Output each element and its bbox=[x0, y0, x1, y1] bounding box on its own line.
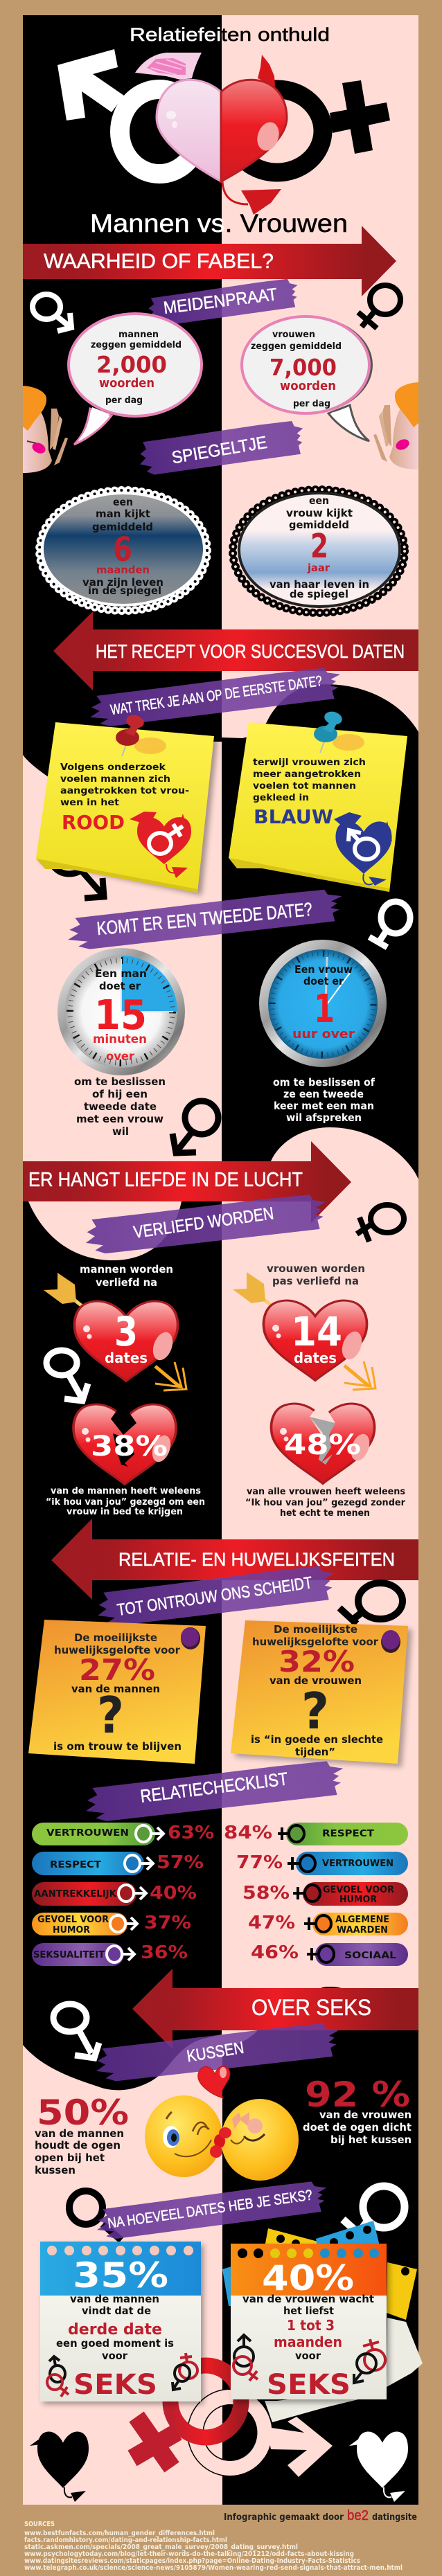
mirror: man: in de spiegel bbox=[88, 584, 161, 597]
mirror: woman: gemiddeld bbox=[289, 519, 349, 531]
row: seksualiteit 36: SEKSUALITEIT bbox=[33, 1950, 105, 1960]
row: respect 84: RESPECT bbox=[322, 1829, 374, 1839]
note: blauw: voelen tot mannen bbox=[253, 781, 356, 791]
ribbon: meidenpraat bbox=[145, 277, 301, 328]
icon: male black near clock bbox=[173, 1101, 218, 1153]
icon: male small black behind note bbox=[51, 843, 104, 898]
text: ik hou van jou women: van alle vrouwen heeft weleens bbox=[247, 1487, 405, 1497]
calendar: 35 percent: 35% bbox=[73, 2255, 168, 2296]
mirror: woman: een bbox=[309, 494, 329, 507]
note: blauw: BLAUW bbox=[254, 805, 333, 828]
icon: small heart bbox=[198, 2066, 230, 2098]
text: mannen worden: verliefd na bbox=[96, 1276, 157, 1289]
note: 32 percent bbox=[231, 1620, 412, 1767]
calendar: 35 percent: voor bbox=[102, 2350, 128, 2362]
row: sociaal 46: 46% bbox=[251, 1942, 299, 1963]
text: man decision bbox=[74, 1075, 166, 1138]
icon: female black small bbox=[357, 1205, 404, 1242]
calendar: 40 percent: het liefst bbox=[283, 2305, 334, 2317]
row: respect 84: 84% bbox=[224, 1823, 272, 1843]
stat: 92 percent: 92 % bbox=[305, 2075, 410, 2115]
checklist: men bbox=[32, 1823, 214, 1966]
row: sociaal 46 bbox=[251, 1942, 408, 1966]
title: Relatiefei ten onthuld bbox=[130, 24, 330, 45]
mirror: man: van zijn leven bbox=[82, 576, 163, 589]
text: ik hou van jou women: het echt te menen bbox=[280, 1508, 370, 1519]
row: gevoel voor humor 37: 37% bbox=[144, 1913, 191, 1933]
row: respect 57: 57% bbox=[157, 1852, 204, 1873]
arrow: over seks: OVER SEKS bbox=[251, 1995, 371, 2020]
note: 27 percent: huwelijksgelofte voor bbox=[54, 1644, 181, 1656]
speech bubble: men: woorden bbox=[99, 376, 154, 391]
speech bubble: women: per dag bbox=[293, 399, 330, 409]
ribbon: wat trek je aan bbox=[87, 665, 343, 728]
note: 32 percent: ? bbox=[301, 1682, 329, 1740]
icon: blue devil heart male bbox=[334, 812, 392, 886]
row: seksualiteit 36: 36% bbox=[141, 1942, 188, 1963]
icon: couple symbols right bbox=[173, 2353, 197, 2390]
note: 27 percent: 27% bbox=[79, 1653, 155, 1687]
note: blauw bbox=[229, 710, 411, 895]
stat: 50 percent: open bij het bbox=[35, 2152, 105, 2164]
note: blauw: gekleed in bbox=[253, 793, 309, 803]
icon: female symbol large bbox=[231, 80, 390, 172]
icon: kissing smileys bbox=[145, 2095, 299, 2181]
note: rood: ROOD bbox=[62, 811, 125, 834]
text: woman decision: om te beslissen of bbox=[273, 1076, 375, 1089]
arrow: over seks bbox=[132, 1969, 418, 2049]
stat: 50 percent: van de mannen bbox=[35, 2127, 124, 2140]
icon: couple symbols left bbox=[47, 2356, 69, 2397]
note: 32 percent: tijden” bbox=[295, 1746, 335, 1758]
mirror: man: een bbox=[113, 496, 133, 508]
text: man decision: met een vrouw bbox=[76, 1113, 163, 1125]
row: vertrouwen 63: 63% bbox=[168, 1823, 214, 1843]
row: vertrouwen 63 bbox=[32, 1823, 214, 1845]
row: algemene waarden 47: 47% bbox=[248, 1913, 295, 1933]
note: 27 percent: is om trouw te blijven bbox=[53, 1740, 182, 1753]
speech bubble: women: 7,000 bbox=[269, 354, 337, 381]
clock: man: over bbox=[106, 1050, 135, 1064]
ribbon: kussen bbox=[94, 2021, 342, 2083]
icon: male symbol large bbox=[58, 49, 199, 174]
sources: www.psychologytoday.com/blog/let-their-words-do-the-talking/201212/odd-facts-about-kissing bbox=[24, 2550, 354, 2558]
sources: facts.randomhistory.com/dating-and-relationship-facts.html bbox=[24, 2537, 227, 2544]
ribbon: meidenpraat: MEIDENPRAAT bbox=[162, 285, 279, 318]
row: respect 57: RESPECT bbox=[50, 1860, 101, 1870]
row: sociaal 46: SOCIAAL bbox=[344, 1951, 396, 1961]
mirror: woman: de spiegel bbox=[290, 588, 348, 600]
stat: 92 percent: bij het kussen bbox=[330, 2134, 412, 2146]
row: vertrouwen 77 bbox=[236, 1852, 408, 1875]
text: man decision: om te beslissen bbox=[74, 1075, 166, 1088]
heart with arrow: 14 dates: dates bbox=[294, 1350, 337, 1366]
clock: man: Een man bbox=[95, 967, 147, 980]
broken heart: 48%: 48% bbox=[284, 1429, 361, 1461]
mirror: man: maanden bbox=[96, 564, 150, 576]
heart with arrow: 3 dates: 3 bbox=[114, 1308, 138, 1355]
text: ik hou van jou men: “ik hou van jou” gezegd om een bbox=[46, 1497, 205, 1508]
note: 32 percent: huwelijksgelofte voor bbox=[252, 1636, 379, 1648]
sources bbox=[24, 2521, 403, 2572]
ribbon: kussen: KUSSEN bbox=[186, 2039, 245, 2066]
stat: 92 percent: doet de ogen dicht bbox=[303, 2121, 412, 2134]
mirror: woman: vrouw kijkt bbox=[286, 507, 353, 519]
sources: SOURCES bbox=[24, 2521, 55, 2528]
heart with arrow: 14 dates: 14 bbox=[291, 1308, 342, 1355]
clock: man: 15 bbox=[94, 991, 147, 1039]
heart with arrow: 14 dates bbox=[233, 1272, 375, 1390]
speech bubble: women bbox=[242, 316, 373, 441]
row: vertrouwen 63: VERTROUWEN bbox=[46, 1828, 129, 1839]
speech bubble: women: woorden bbox=[280, 379, 336, 393]
icon: couple symbols right second bbox=[354, 2339, 385, 2383]
text: vrouwen worden bbox=[267, 1262, 365, 1287]
text: ik hou van jou women bbox=[245, 1487, 406, 1519]
calendar: 35 percent: vindt dat de bbox=[82, 2305, 151, 2317]
credit line: datingsite bbox=[372, 2512, 417, 2523]
arrow: het recept bbox=[53, 611, 418, 690]
text: ik hou van jou men: van de mannen heeft weleens bbox=[51, 1486, 201, 1496]
note: 32 percent: 32% bbox=[279, 1645, 355, 1679]
clock: woman: Een vrouw bbox=[294, 963, 353, 976]
calendar: 35 percent bbox=[40, 2242, 204, 2404]
mirror: man: 6 bbox=[113, 530, 132, 569]
clock: woman: doet er bbox=[303, 975, 344, 987]
icon: white female right bbox=[343, 2186, 405, 2240]
calendar: 40 percent: 40% bbox=[262, 2258, 354, 2298]
clock: man: minuten bbox=[93, 1032, 147, 1046]
arrow: waarheid of fabel: WAARHEID OF FABEL? bbox=[44, 250, 274, 273]
broken heart: 38% bbox=[73, 1404, 176, 1485]
row: aantrekkelijk 40: AANTREKKELIJK bbox=[34, 1889, 117, 1899]
sources: www.datingsitesreviews.com/staticpages/index.php?page=Online-Dating-Industry-Facts-Statistics bbox=[24, 2557, 360, 2565]
ribbon: verliefd worden: VERLIEFD WORDEN bbox=[132, 1204, 275, 1242]
arrow: relatie en huwelijk: RELATIE- EN HUWELIJKSFEITEN bbox=[118, 1549, 395, 1570]
mirror: man: gemiddeld bbox=[92, 521, 153, 533]
clock: woman: uur over bbox=[292, 1027, 355, 1041]
row: vertrouwen 77: VERTROUWEN bbox=[322, 1859, 394, 1869]
ribbon: relatiechecklist: RELATIECHECKLIST bbox=[139, 1768, 289, 1807]
mirror: woman: van haar leven in bbox=[269, 578, 369, 591]
arrow: er hangt liefde bbox=[23, 1141, 351, 1223]
calendar: 35 percent: derde date bbox=[68, 2321, 162, 2338]
calendar: 40 percent bbox=[231, 2244, 389, 2403]
speech bubble: men: zeggen gemiddeld bbox=[91, 340, 182, 350]
clock: woman bbox=[259, 940, 387, 1067]
mirror: man bbox=[39, 490, 207, 611]
icon: black devil heart bbox=[30, 2431, 89, 2502]
calendar: 35 percent: SEKS bbox=[73, 2369, 157, 2401]
calendar: 35 percent: van de mannen bbox=[70, 2293, 159, 2305]
note: 27 percent bbox=[28, 1620, 206, 1764]
row: gevoel voor humor 58 bbox=[242, 1882, 408, 1906]
text: mannen worden bbox=[80, 1263, 173, 1289]
speech bubble: women: zeggen gemiddeld bbox=[251, 341, 342, 352]
credit line: be2 bbox=[347, 2508, 369, 2523]
calendar: 40 percent: van de vrouwen wacht bbox=[242, 2293, 374, 2305]
icon: couple symbols left second bbox=[233, 2335, 258, 2381]
stat: 50 percent bbox=[35, 2093, 129, 2176]
note: 32 percent: De moeilijkste bbox=[274, 1623, 357, 1636]
broken heart: 38%: 38% bbox=[91, 1431, 168, 1463]
checklist: women bbox=[224, 1823, 408, 1966]
icon: female black behind note bbox=[339, 1583, 403, 1624]
stat: 50 percent: kussen bbox=[35, 2164, 76, 2176]
clock: man: doet er bbox=[99, 980, 141, 992]
row: algemene waarden 47: ALGEMENE bbox=[335, 1915, 389, 1925]
text: vrouwen worden: vrouwen worden bbox=[267, 1262, 365, 1275]
mirror: woman: jaar bbox=[307, 562, 330, 574]
mirror: woman bbox=[233, 490, 405, 613]
icon: male small white bbox=[33, 294, 71, 331]
subtitle: Mannen vs . Vrouwen bbox=[90, 209, 348, 238]
row: gevoel voor humor 58: HUMOR bbox=[339, 1895, 377, 1905]
ribbon: tot ontrouw ons scheidt bbox=[95, 1564, 337, 1628]
ribbon: verliefd worden bbox=[83, 1192, 328, 1255]
text: woman decision: ze een tweede bbox=[283, 1088, 364, 1100]
icon: large male bottom bbox=[195, 2397, 333, 2477]
clock: woman: 1 bbox=[314, 987, 335, 1032]
text: woman decision: keer met een man bbox=[274, 1100, 374, 1112]
note: 27 percent: De moeilijkste bbox=[74, 1631, 157, 1644]
text: ik hou van jou men bbox=[46, 1486, 205, 1517]
heart with arrow: 3 dates bbox=[44, 1273, 186, 1390]
text: man decision: tweede date bbox=[84, 1100, 157, 1113]
speech bubble: men bbox=[69, 314, 202, 445]
ribbon: spiegeltje bbox=[137, 419, 306, 476]
icon: white male over seks bbox=[53, 2004, 99, 2058]
text: woman decision: wil afspreken bbox=[286, 1111, 362, 1124]
text: vrouwen worden: pas verliefd na bbox=[272, 1275, 359, 1287]
note: 32 percent: is “in goede en slechte bbox=[251, 1733, 383, 1746]
text: ik hou van jou men: vrouw in bed te krijgen bbox=[67, 1507, 183, 1517]
row: respect 84 bbox=[224, 1823, 408, 1845]
arrow: relatie en huwelijk bbox=[51, 1519, 418, 1600]
arrow: er hangt liefde: ER HANGT LIEFDE IN DE LUCHT bbox=[28, 1169, 303, 1191]
row: algemene waarden 47 bbox=[248, 1913, 408, 1935]
calendar: 40 percent: maanden bbox=[274, 2334, 342, 2350]
stat: 92 percent: van de vrouwen bbox=[319, 2109, 412, 2121]
note: blauw: meer aangetrokken bbox=[253, 769, 361, 780]
ribbon: tot ontrouw ons scheidt: TOT ONTROUW ONS SCHEIDT bbox=[116, 1573, 314, 1620]
icon: whispering face right bbox=[373, 382, 418, 469]
icon: angel devil heart bbox=[135, 53, 287, 215]
note: 27 percent: van de mannen bbox=[71, 1683, 160, 1695]
row: seksualiteit 36 bbox=[32, 1942, 188, 1966]
icon: whispering face left bbox=[23, 386, 68, 473]
row: gevoel voor humor 58: 58% bbox=[242, 1883, 290, 1904]
row: gevoel voor humor 37 bbox=[32, 1913, 191, 1935]
ribbon: spiegeltje: SPIEGELTJE bbox=[170, 433, 269, 467]
icon: red devil heart female bbox=[130, 812, 191, 878]
sources: www.telegraph.co.uk/science/science-news/9105879/Women-wearing-red-send-signals-that-attract-men.html bbox=[24, 2564, 403, 2572]
note: rood: wen in het bbox=[60, 798, 119, 808]
icon: white male bbox=[46, 1350, 88, 1401]
mirror: woman: 2 bbox=[310, 527, 328, 566]
clock: man bbox=[58, 948, 185, 1075]
note: rood: aangetrokken tot vrou- bbox=[60, 786, 189, 796]
back sheets: calendar stack bbox=[222, 2221, 423, 2422]
note: blauw: terwijl vrouwen zich bbox=[253, 758, 366, 768]
icon: female small white bbox=[369, 902, 410, 947]
row: gevoel voor humor 37: GEVOEL VOOR bbox=[37, 1915, 109, 1925]
row: gevoel voor humor 58: GEVOEL VOOR bbox=[323, 1885, 394, 1895]
ribbon: komt er een tweede date bbox=[66, 887, 344, 951]
row: vertrouwen 77: 77% bbox=[236, 1852, 283, 1873]
row: aantrekkelijk 40 bbox=[32, 1882, 197, 1906]
sources: www.bestfunfacts.com/human_gender_differences.html bbox=[24, 2530, 215, 2537]
stat: 92 percent bbox=[303, 2075, 412, 2146]
calendar: 40 percent: voor bbox=[295, 2350, 321, 2362]
credit line bbox=[224, 2508, 417, 2523]
note: 27 percent: ? bbox=[97, 1686, 124, 1744]
arrow: waarheid of fabel bbox=[23, 226, 396, 296]
broken heart: 48% bbox=[272, 1404, 374, 1483]
icon: large female bottom bbox=[132, 2365, 241, 2467]
note: rood bbox=[36, 713, 218, 895]
text: mannen worden: mannen worden bbox=[80, 1263, 173, 1276]
heart with arrow: 3 dates: dates bbox=[105, 1350, 148, 1366]
icon: white devil heart bbox=[349, 2431, 408, 2502]
ribbon: wat trek je aan: WAT TREK JE AAN OP DE EERSTE DATE? bbox=[109, 673, 323, 718]
text: man decision: of hij een bbox=[92, 1088, 148, 1100]
calendar: 40 percent: SEKS bbox=[267, 2369, 351, 2401]
row: gevoel voor humor 37: HUMOR bbox=[53, 1925, 90, 1935]
icon: blue pushpin bbox=[314, 710, 364, 753]
text: ik hou van jou women: “Ik hou van jou” gezegd zonder bbox=[245, 1498, 406, 1508]
note: rood: Volgens onderzoek bbox=[60, 762, 166, 773]
calendar: 40 percent: 1 tot 3 bbox=[287, 2317, 335, 2334]
sources: static.askmen.com/specials/2008_great_male_survey/2008_dating_survey.html bbox=[24, 2543, 298, 2551]
ribbon: relatiechecklist bbox=[83, 1759, 346, 1823]
calendar: 35 percent: een goed moment is bbox=[56, 2337, 174, 2350]
row: aantrekkelijk 40: 40% bbox=[150, 1883, 197, 1904]
stat: 50 percent: houdt de ogen bbox=[35, 2139, 121, 2152]
row: algemene waarden 47: WAARDEN bbox=[337, 1925, 388, 1935]
speech bubble: men: per dag bbox=[105, 395, 143, 406]
row: respect 57 bbox=[32, 1852, 204, 1875]
text: man decision: wil bbox=[112, 1125, 129, 1138]
speech bubble: men: 2,000 bbox=[96, 351, 167, 378]
text: woman decision bbox=[273, 1076, 375, 1124]
mirror: man: man kijkt bbox=[96, 508, 150, 520]
icon: red pushpin bbox=[116, 713, 166, 756]
credit line: Infographic gemaakt door bbox=[224, 2512, 344, 2523]
speech bubble: women: vrouwen bbox=[272, 330, 315, 340]
note: rood: voelen mannen zich bbox=[60, 774, 170, 785]
stat: 50 percent: 50% bbox=[37, 2093, 129, 2133]
ribbon: na hoeveel dates: NA HOEVEEL DATES HEB JE SEKS? bbox=[107, 2187, 313, 2232]
speech bubble: men: mannen bbox=[118, 330, 159, 340]
icon: black ring left bbox=[69, 2191, 121, 2240]
ribbon: komt er een tweede date: KOMT ER EEN TWEEDE DATE? bbox=[96, 899, 313, 939]
icon: female small black bbox=[358, 285, 400, 328]
note: 32 percent: van de vrouwen bbox=[269, 1674, 362, 1687]
